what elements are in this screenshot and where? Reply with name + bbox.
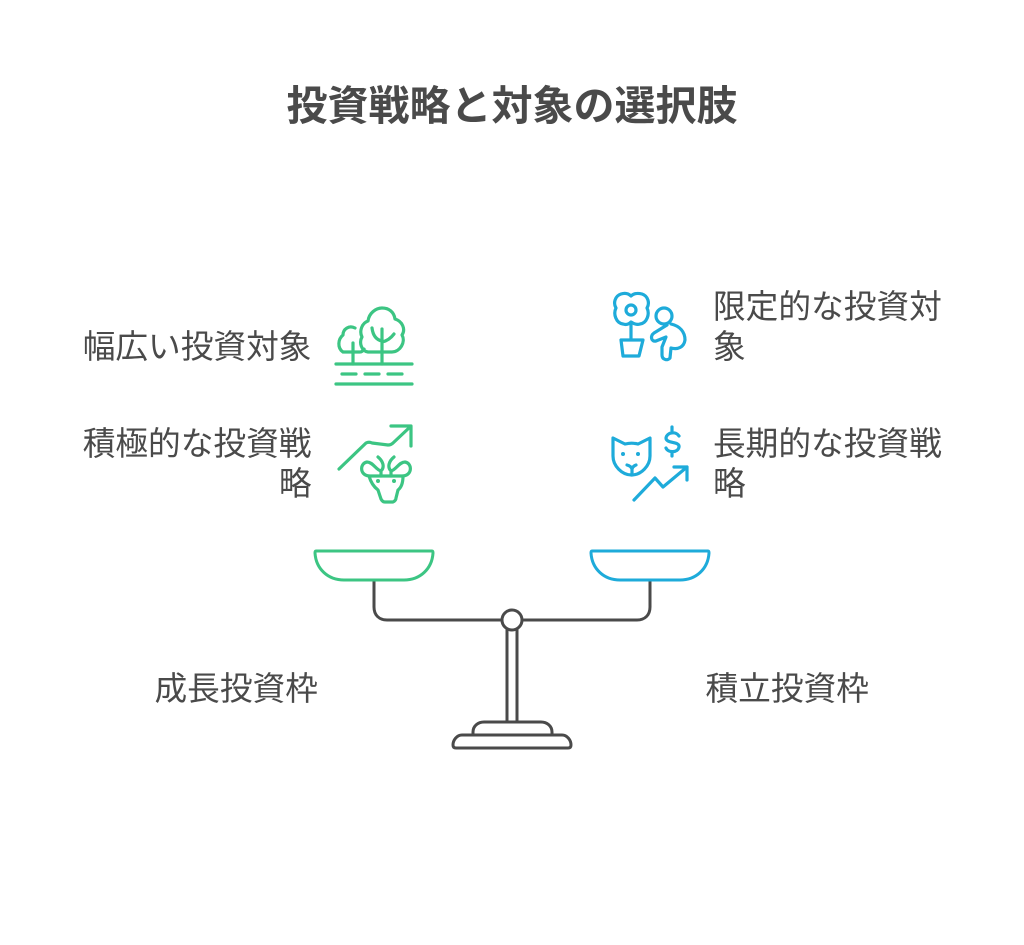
- label: active investment strategy: 積極的な投資戦: [83, 425, 312, 462]
- icon: trees and road: [336, 308, 412, 384]
- label: long-term investment strategy: 長期的な投資戦: [713, 425, 942, 462]
- label: long-term investment strategy: [713, 425, 942, 502]
- label: active investment strategy: 略: [279, 465, 312, 502]
- label: growth investment quota: 成長投資枠: [154, 670, 318, 707]
- icon: rising arrow and bull: [339, 426, 411, 502]
- pivot: [502, 610, 522, 630]
- stand foot: [453, 735, 571, 748]
- right pan: [591, 551, 709, 580]
- label: limited investment targets: [713, 288, 942, 365]
- post: [507, 630, 517, 721]
- label: limited investment targets: 象: [713, 328, 746, 365]
- icon: flower pot and person: [615, 293, 685, 360]
- icon: cat face and dollar with rising arrow: [613, 427, 687, 500]
- title: 投資戦略と対象の選択肢: [286, 83, 738, 129]
- label: limited investment targets: 限定的な投資対: [713, 288, 942, 325]
- scale: beam and pans: [315, 551, 709, 748]
- left pan: [315, 551, 433, 580]
- label: tsumitate investment quota: 積立投資枠: [706, 670, 869, 707]
- arm: [374, 581, 650, 620]
- label: broad investment targets: 幅広い投資対象: [83, 328, 312, 364]
- label: long-term investment strategy: 略: [713, 465, 746, 502]
- label: active investment strategy: [83, 425, 312, 502]
- stand base: [473, 722, 552, 735]
